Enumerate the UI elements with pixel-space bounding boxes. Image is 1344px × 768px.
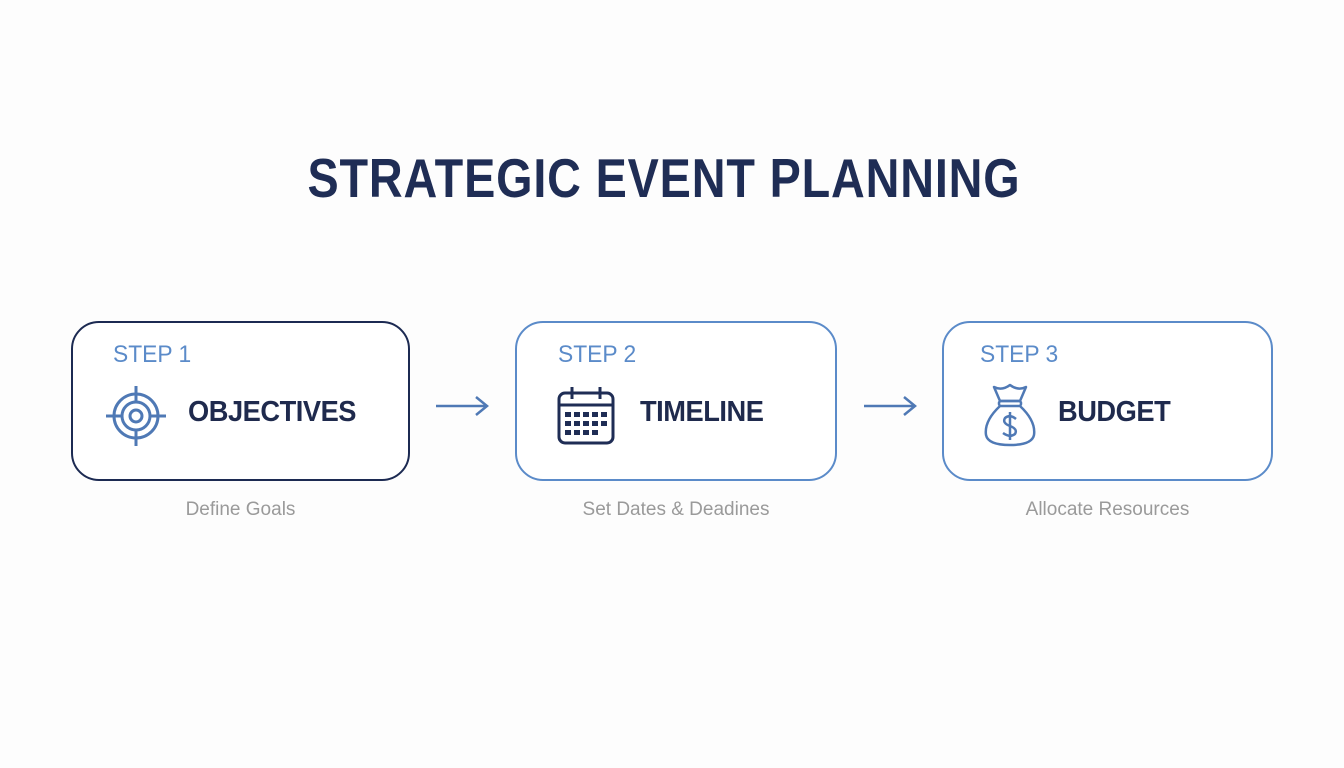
panel: step 3 budget [942, 321, 1273, 481]
step 3 label: STEP 3 [980, 341, 1058, 368]
objectives heading: OBJECTIVES [188, 396, 356, 428]
icon: calendar [558, 387, 614, 444]
icon: money bag [984, 384, 1036, 446]
arrow 1 [436, 396, 489, 416]
icon: target [106, 386, 166, 446]
budget heading: BUDGET [1058, 396, 1170, 428]
subtitle: set dates: Set Dates & Deadines [583, 499, 769, 520]
step 2 label: STEP 2 [558, 341, 636, 368]
subtitle: allocate resources: Allocate Resources [1026, 499, 1189, 520]
step 1 label: STEP 1 [113, 341, 191, 368]
timeline heading: TIMELINE [640, 396, 763, 428]
title: STRATEGIC EVENT PLANNING [307, 147, 1021, 209]
arrow 2 [864, 396, 917, 416]
panel: step 2 timeline [515, 321, 837, 481]
subtitle: define goals: Define Goals [186, 499, 295, 520]
panel: step 1 objectives [71, 321, 410, 481]
